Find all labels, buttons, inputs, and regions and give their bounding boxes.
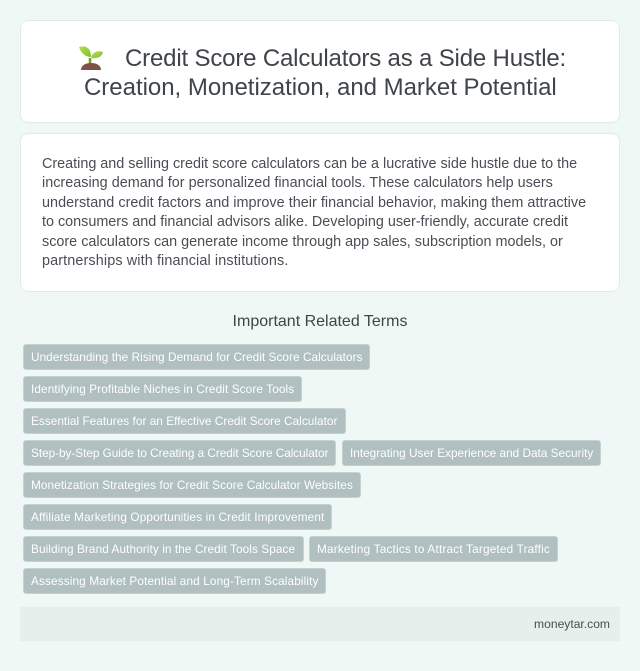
- tag: [23, 344, 370, 370]
- tag: [23, 568, 326, 594]
- description card: [20, 133, 620, 292]
- tag: Identifying Profitable Niches in Credit Score Tools: [31, 382, 294, 396]
- footer source: moneytar.com: [534, 617, 610, 631]
- tag: [23, 440, 336, 466]
- tag: Assessing Market Potential and Long-Term Scalability: [31, 574, 319, 588]
- tag: [23, 376, 302, 402]
- description text: understand credit factors and improve their financial behavior, making them attractive: [42, 195, 586, 211]
- footer bar: [20, 607, 620, 641]
- description text: [42, 156, 586, 269]
- tag: Monetization Strategies for Credit Score Calculator Websites: [31, 478, 353, 492]
- tag: Building Brand Authority in the Credit Tools Space: [31, 542, 295, 556]
- section heading: Important Related Terms: [233, 313, 407, 330]
- tag: [23, 504, 332, 530]
- description text: score calculators can generate income through app sales, subscription models, or: [42, 234, 563, 250]
- description text: partnerships with financial institutions.: [42, 253, 288, 269]
- tag: [23, 408, 346, 434]
- icon: seedling: [79, 46, 103, 70]
- tag: [23, 536, 304, 562]
- tag: Essential Features for an Effective Credit Score Calculator: [31, 414, 337, 428]
- tag: Step-by-Step Guide to Creating a Credit Score Calculator: [31, 446, 328, 460]
- tag: [309, 536, 558, 562]
- description text: to consumers and financial advisors alike. Developing user-friendly, accurate credit: [42, 214, 568, 230]
- tag list: [23, 344, 601, 594]
- tag: Integrating User Experience and Data Security: [350, 446, 593, 460]
- tag: [23, 472, 361, 498]
- title: Credit Score Calculators as a Side Hustle:: [125, 45, 566, 72]
- tag: [342, 440, 601, 466]
- header card: [20, 20, 620, 123]
- tag: Marketing Tactics to Attract Targeted Traffic: [317, 542, 550, 556]
- description text: Creating and selling credit score calculators can be a lucrative side hustle due to the: [42, 156, 577, 172]
- tag: Affiliate Marketing Opportunities in Credit Improvement: [31, 510, 324, 524]
- title: [84, 45, 566, 101]
- tag: Understanding the Rising Demand for Credit Score Calculators: [31, 350, 363, 364]
- description text: increasing demand for personalized financial tools. These calculators help users: [42, 175, 553, 191]
- title: Creation, Monetization, and Market Potential: [84, 74, 557, 101]
